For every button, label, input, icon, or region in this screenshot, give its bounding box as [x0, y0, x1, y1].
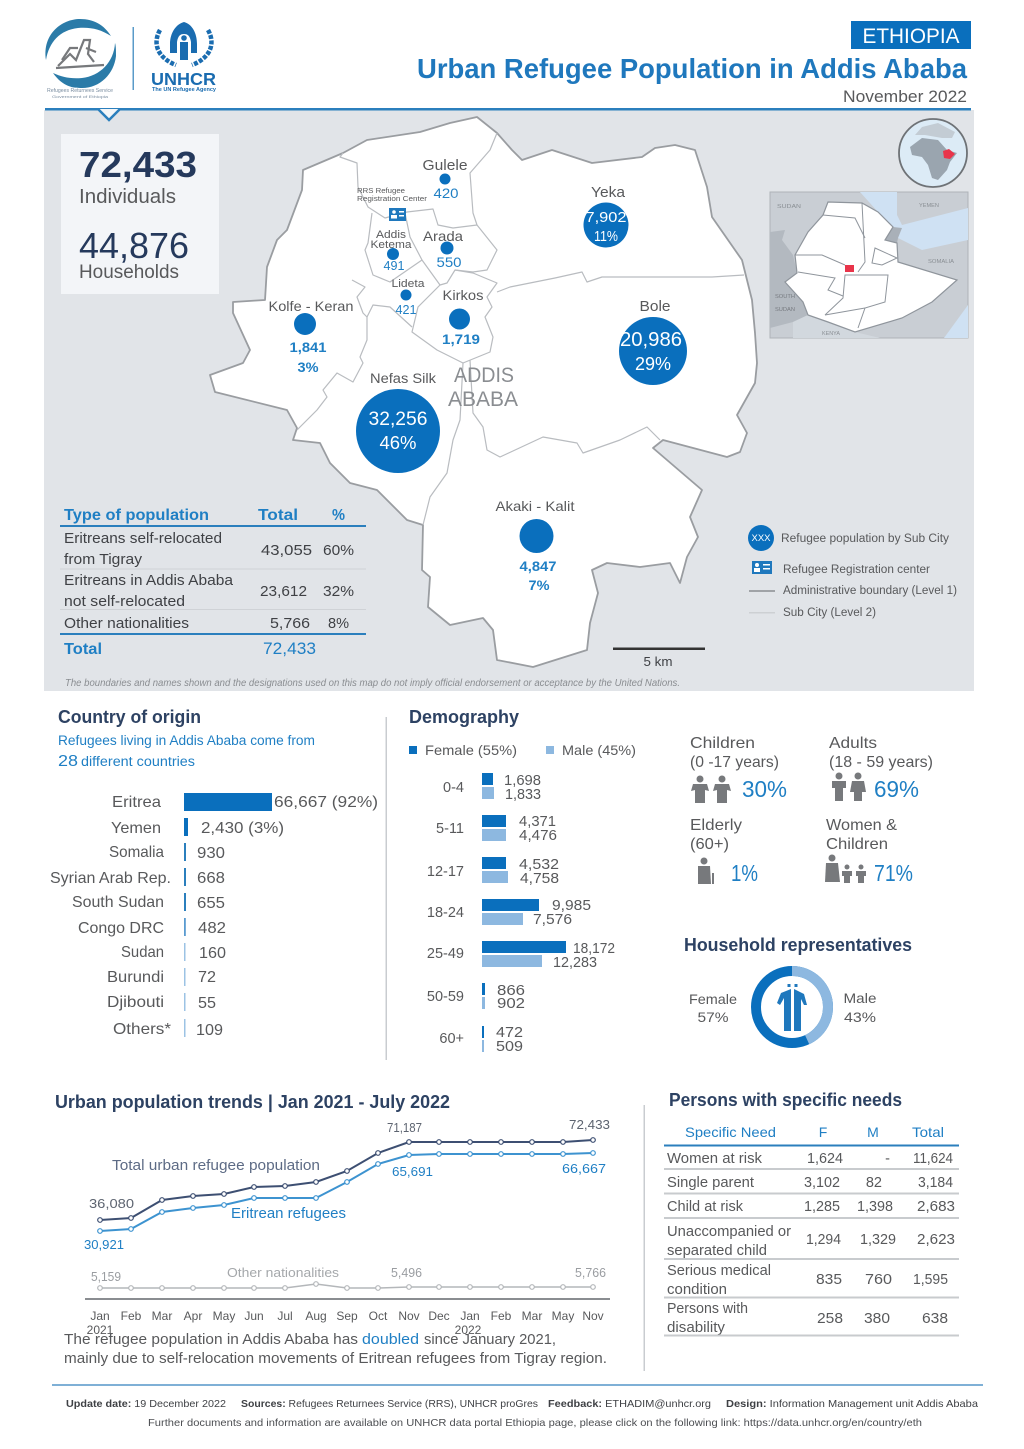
bar chart: country of origin: 109 — [196, 1022, 223, 1039]
scale bar — [613, 648, 705, 669]
table: specific needs: Single parent — [667, 1175, 754, 1191]
table: specific needs: 3,102 — [804, 1175, 840, 1191]
bar chart: age and sex: 509 — [496, 1039, 523, 1055]
data labels: 65,691 — [392, 1164, 433, 1179]
time axis labels: Sep — [336, 1309, 358, 1323]
footer: Design: Information Management unit Addis Ababa — [726, 1398, 978, 1410]
data labels: 5,766 — [575, 1265, 606, 1280]
stat: children — [690, 735, 787, 803]
bar chart: age and sex: 4,532 — [519, 857, 559, 873]
line chart — [84, 1117, 610, 1337]
series: other nationalities — [98, 1282, 595, 1290]
bar chart: age and sex — [427, 773, 615, 1055]
data labels: Other nationalities — [227, 1265, 340, 1280]
table: type of population: Total — [64, 641, 102, 658]
data labels: 30,921 — [84, 1237, 124, 1252]
stat: elderly: 1% — [731, 860, 758, 886]
logo: Refugees and Returnees Service: Government of Ethiopia — [52, 94, 109, 99]
heading: Country of origin — [58, 707, 201, 727]
sub city: Addis Ketema: Addis — [376, 229, 407, 241]
table: specific needs: Unaccompanied or — [667, 1224, 791, 1240]
intro text — [58, 733, 315, 770]
sub city: Kolfe-Keran: 1,841 — [290, 339, 327, 355]
bar chart: country of origin: 930 — [197, 845, 225, 862]
stat: children: 30% — [742, 776, 787, 802]
heading: Demography — [409, 707, 519, 727]
data labels: 66,667 — [562, 1161, 606, 1176]
sub city: Akaki-Kalit: 7% — [528, 577, 550, 593]
sub city: Yeka: 11% — [594, 228, 618, 245]
map legend: Refugee Registration center — [783, 564, 930, 576]
time axis labels: Jul — [277, 1309, 293, 1323]
table: type of population: 8% — [328, 615, 349, 632]
logo: Refugees and Returnees Service — [45, 19, 116, 99]
data labels: 5,496 — [391, 1265, 422, 1280]
sub city: Addis Ketema: Ketema — [370, 239, 412, 251]
table: type of population: Type of population — [64, 507, 209, 524]
data labels: 36,080 — [89, 1196, 134, 1211]
bar chart: age and sex: 9,985 — [552, 898, 591, 914]
logo: UNHCR: UNHCR — [151, 69, 216, 89]
bar chart: country of origin: 668 — [197, 870, 225, 887]
icon: woman and two children — [825, 854, 866, 883]
map of Addis Ababa sub cities — [210, 117, 757, 667]
logo: UNHCR: The UN Refugee Agency — [152, 87, 217, 93]
table: type of population: 23,612 — [260, 583, 307, 600]
date: November 2022 — [843, 87, 967, 106]
table: specific needs: Women at risk — [667, 1151, 763, 1167]
header — [45, 19, 971, 106]
table: specific needs: Total — [912, 1124, 944, 1140]
stat: children: Children — [690, 735, 755, 752]
inset map of Ethiopia: KENYA — [822, 331, 841, 337]
sub city: Akaki-Kalit: Akaki - Kalit — [496, 498, 575, 514]
table: specific needs: separated child — [667, 1243, 767, 1259]
table: type of population — [60, 507, 366, 658]
table: specific needs: 1,624 — [807, 1151, 843, 1167]
bar chart: age and sex: 0-4 — [443, 780, 464, 796]
legend: gender — [409, 742, 636, 758]
bar chart: country of origin: Djibouti — [107, 994, 164, 1011]
sub city: Gulele: Gulele — [422, 158, 468, 174]
sub city: Bole: 20,986 — [620, 329, 682, 351]
table: specific needs: 2,683 — [917, 1199, 955, 1215]
stat: elderly — [690, 817, 758, 886]
inset map of Ethiopia: SOMALIA — [928, 259, 954, 265]
table: type of population: not self-relocated — [64, 593, 185, 610]
footer — [52, 1384, 983, 1429]
time axis labels: Nov — [398, 1309, 420, 1323]
table: specific needs: disability — [667, 1320, 726, 1336]
sub city: Kirkos: 1,719 — [442, 331, 480, 347]
table: specific needs: 258 — [817, 1311, 843, 1327]
household representatives: Female — [689, 991, 737, 1007]
time axis labels: Mar — [522, 1309, 542, 1323]
table: specific needs: 760 — [865, 1272, 892, 1288]
table: specific needs: 1,285 — [804, 1199, 840, 1215]
legend: gender: Female (55%) — [425, 742, 517, 758]
bar chart: age and sex: 1,833 — [505, 787, 541, 803]
bar chart: country of origin: Others* — [113, 1021, 171, 1038]
bar chart: country of origin — [50, 793, 378, 1039]
table: specific needs: M — [867, 1124, 879, 1140]
bar chart: country of origin: Congo DRC — [78, 920, 164, 937]
table: specific needs: Serious medical — [667, 1263, 771, 1279]
callout: key figures: Households — [79, 262, 179, 283]
bar chart: country of origin: Syrian Arab Rep. — [50, 870, 171, 887]
map legend: Refugee population by Sub City — [781, 533, 949, 545]
sub city: Yeka: Yeka — [591, 185, 626, 201]
bar chart: age and sex: 12,283 — [553, 955, 597, 971]
bar chart: age and sex: 4,758 — [520, 871, 559, 887]
table: specific needs: - — [885, 1151, 890, 1167]
table: specific needs: 638 — [922, 1311, 948, 1327]
bar chart: country of origin: Sudan — [121, 944, 164, 961]
table: type of population: % — [332, 507, 345, 524]
sub city: Kolfe-Keran: 3% — [298, 359, 319, 375]
legend: gender: Male (45%) — [562, 742, 636, 758]
table: type of population: 43,055 — [261, 542, 312, 559]
bar chart: country of origin: 66,667 (92%) — [274, 794, 378, 811]
inset map of Ethiopia: SOUTH — [775, 294, 795, 300]
map legend: Administrative boundary (Level 1) — [783, 585, 957, 597]
time axis labels — [87, 1309, 604, 1337]
bar chart: age and sex: 1,698 — [504, 773, 541, 789]
time axis labels: May — [213, 1309, 235, 1323]
sub city: Arada: 550 — [436, 254, 462, 270]
icon: two children — [691, 776, 731, 803]
table: specific needs: 1,398 — [857, 1199, 893, 1215]
footer: Sources: Refugees Returnees Service (RRS), UNHCR proGres — [241, 1398, 538, 1410]
sub city: Gulele — [422, 158, 468, 201]
time axis labels: Apr — [184, 1309, 202, 1323]
bar chart: age and sex: 4,476 — [519, 828, 557, 844]
table: specific needs: condition — [667, 1282, 727, 1298]
household representatives: Household representatives — [684, 935, 912, 955]
sub city: Bole: 29% — [635, 354, 671, 374]
trend commentary: since January 2021, — [424, 1331, 556, 1348]
table: specific needs: Persons with — [667, 1301, 748, 1317]
panel: country of origin — [50, 707, 378, 1039]
table: specific needs: 380 — [864, 1311, 890, 1327]
table: specific needs: 82 — [866, 1175, 882, 1191]
bar chart: age and sex: 902 — [497, 996, 525, 1012]
sub city: Lideta — [392, 278, 425, 317]
sub city: Kirkos — [442, 288, 484, 347]
sub city: Lideta: Lideta — [392, 278, 425, 290]
data labels: 72,433 — [569, 1117, 610, 1132]
series: total — [98, 1138, 595, 1222]
inset map of Ethiopia: YEMEN — [919, 203, 939, 209]
logo: Refugees and Returnees Service: Refugees Returnees Service — [47, 88, 113, 94]
time axis labels: Dec — [428, 1309, 450, 1323]
bar chart: country of origin: South Sudan — [72, 894, 164, 911]
table: specific needs — [664, 1124, 959, 1336]
data labels: Eritrean refugees — [231, 1206, 346, 1222]
sub city: Kolfe-Keran: Kolfe - Keran — [268, 298, 354, 314]
panel: persons with specific needs — [664, 1090, 959, 1336]
household representatives: 57% — [698, 1009, 728, 1025]
bar chart: age and sex: 25-49 — [427, 946, 464, 962]
registration center label and icon: Registration Center — [357, 196, 428, 203]
sub city: Arada: Arada — [423, 228, 463, 244]
sub city: Addis Ketema — [370, 229, 412, 273]
bar chart: country of origin: 2,430 (3%) — [201, 820, 284, 837]
table: type of population: from Tigray — [64, 551, 143, 568]
trend commentary: The refugee population in Addis Ababa has — [64, 1331, 358, 1348]
table: specific needs: 1,329 — [860, 1232, 896, 1248]
globe locator — [899, 119, 967, 187]
stat: women and children — [825, 817, 913, 886]
time axis labels: Feb — [121, 1309, 142, 1323]
bar chart: country of origin: 160 — [199, 945, 226, 962]
sub city: Bole — [619, 299, 687, 385]
sub city: Yeka — [584, 185, 628, 248]
intro text: 28 — [58, 753, 78, 770]
stat: women and children: 71% — [874, 860, 913, 886]
bar chart: age and sex: 18,172 — [573, 941, 615, 957]
table: specific needs: 3,184 — [918, 1175, 953, 1191]
time axis labels: Aug — [305, 1309, 327, 1323]
bar chart: country of origin: Somalia — [109, 844, 164, 861]
time axis labels: Feb — [491, 1309, 512, 1323]
registration center label and icon — [357, 188, 428, 221]
panel: urban population trends — [55, 1092, 610, 1367]
footer: Feedback: ETHADIM@unhcr.org — [548, 1398, 711, 1410]
callout: key figures: 72,433 — [79, 144, 197, 185]
logo: UNHCR — [151, 22, 217, 93]
sub city: Nefas Silk: 46% — [380, 433, 416, 453]
bar chart: country of origin: 55 — [198, 995, 216, 1012]
bar chart: age and sex: 7,576 — [533, 912, 572, 928]
stat: adults — [829, 735, 933, 802]
table: type of population: 5,766 — [270, 615, 310, 632]
sub city: Addis Ketema: 491 — [384, 259, 405, 273]
scale bar: 5 km — [644, 655, 672, 669]
table: type of population: Total — [258, 507, 298, 524]
bar chart: age and sex: 18-24 — [427, 905, 464, 921]
bar chart: country of origin: 655 — [197, 895, 225, 912]
country tag: ETHIOPIA — [862, 25, 960, 48]
registration center label and icon: RRS Refugee — [357, 188, 405, 195]
sub city: Akaki-Kalit — [496, 498, 575, 593]
stat: adults: (18 - 59 years) — [829, 754, 933, 771]
table: specific needs: F — [819, 1124, 827, 1140]
panel: demography — [409, 707, 933, 1055]
table: specific needs: 1,595 — [913, 1272, 948, 1288]
intro text: Refugees living in Addis Ababa come from — [58, 733, 315, 748]
inset map of Ethiopia — [770, 192, 968, 338]
icon: elderly person — [698, 858, 714, 884]
stat: elderly: (60+) — [690, 836, 729, 853]
bar chart: country of origin: Eritrea — [112, 794, 161, 811]
city name: ADDIS — [454, 364, 514, 387]
table: type of population: 60% — [323, 542, 354, 559]
sub city: Akaki-Kalit: 4,847 — [520, 558, 557, 574]
intro text: different countries — [81, 754, 195, 769]
time axis labels: Nov — [582, 1309, 604, 1323]
trend commentary: doubled — [362, 1331, 419, 1348]
sub city: Yeka: 7,902 — [586, 209, 626, 226]
table: type of population: Eritreans self-relocated — [64, 530, 222, 547]
sub city: Bole: Bole — [640, 299, 670, 315]
data labels: 71,187 — [387, 1120, 422, 1135]
table: type of population: 72,433 — [263, 639, 316, 658]
stat: adults: Adults — [829, 735, 877, 752]
inset map of Ethiopia: SUDAN — [777, 204, 801, 210]
sub city: Gulele: 420 — [434, 185, 459, 201]
data labels: Total urban refugee population — [112, 1158, 320, 1174]
stat: adults: 69% — [874, 776, 919, 802]
table: type of population: Other nationalities — [64, 615, 189, 632]
sub city: Lideta: 421 — [396, 303, 417, 317]
stat: children: (0 -17 years) — [690, 754, 779, 771]
time axis labels: 2021 — [87, 1323, 114, 1337]
sub city: Kirkos: Kirkos — [442, 288, 484, 303]
callout: key figures — [61, 134, 219, 294]
donut chart: household head gender — [756, 971, 828, 1043]
bar chart: age and sex: 12-17 — [427, 864, 464, 880]
sub city: Arada — [423, 228, 463, 270]
household representatives: Male — [844, 990, 877, 1006]
trend commentary: mainly due to self-relocation movements of Eritrean refugees from Tigray region. — [64, 1350, 607, 1367]
stat: women and children: Women & — [826, 817, 897, 834]
map legend — [748, 525, 957, 619]
footer: Further documents and information are available on UNHCR data portal Ethiopia page, please click on the following link: https://data.unhcr.org/en/country/eth — [148, 1417, 922, 1429]
panel: map — [44, 108, 974, 691]
callout: key figures: Individuals — [79, 186, 176, 208]
time axis labels: 2022 — [455, 1323, 482, 1337]
icon: two adults — [832, 772, 866, 801]
bar chart: age and sex: 866 — [497, 983, 525, 999]
table: specific needs: Child at risk — [667, 1199, 744, 1215]
table: specific needs: 11,624 — [913, 1151, 953, 1167]
bar chart: age and sex: 4,371 — [519, 814, 556, 830]
map disclaimer: The boundaries and names shown and the designations used on this map do not imply official endorsement or acceptance by the United Nations. — [65, 678, 680, 689]
sub city: Nefas Silk: Nefas Silk — [370, 371, 436, 386]
bar chart: country of origin: Yemen — [111, 820, 161, 837]
sub city: Nefas Silk: 32,256 — [368, 409, 428, 430]
city name: ABABA — [448, 388, 518, 411]
stat: elderly: Elderly — [690, 817, 742, 834]
bar chart: country of origin: 72 — [198, 969, 216, 986]
footer: Update date: 19 December 2022 — [66, 1398, 226, 1410]
data labels: 5,159 — [91, 1269, 121, 1284]
time axis labels: Oct — [369, 1309, 388, 1323]
sub city: Kolfe-Keran — [268, 298, 354, 375]
table: specific needs: 835 — [816, 1272, 842, 1288]
bar chart: age and sex: 472 — [496, 1025, 523, 1041]
table: specific needs: 1,294 — [806, 1232, 841, 1248]
heading: Urban population trends | Jan 2021 - July 2022 — [55, 1092, 450, 1112]
stat: women and children: Children — [826, 836, 888, 853]
time axis labels: Mar — [152, 1309, 172, 1323]
inset map of Ethiopia: SUDAN — [775, 307, 795, 313]
time axis labels: Jan — [460, 1309, 480, 1323]
bar chart: age and sex: 5-11 — [436, 821, 464, 837]
bar chart: age and sex: 60+ — [439, 1031, 464, 1047]
map legend: Sub City (Level 2) — [783, 607, 876, 619]
callout: key figures: 44,876 — [79, 225, 189, 266]
trend commentary — [64, 1331, 607, 1367]
household representatives — [684, 935, 912, 1043]
title: Urban Refugee Population in Addis Ababa — [417, 53, 967, 84]
bar chart: country of origin: Burundi — [107, 969, 164, 986]
sub city: Nefas Silk — [356, 371, 440, 473]
city name — [448, 364, 518, 411]
table: specific needs: Specific Need — [685, 1124, 776, 1140]
country tag — [851, 21, 971, 49]
time axis labels: Jan — [90, 1309, 110, 1323]
map legend: XXX — [752, 533, 770, 543]
bar chart: age and sex: 50-59 — [427, 989, 464, 1005]
bar chart: country of origin: 482 — [198, 920, 226, 937]
data labels — [84, 1117, 610, 1284]
time axis labels: Jun — [244, 1309, 264, 1323]
series: Eritrean — [98, 1151, 595, 1233]
heading: Persons with specific needs — [669, 1090, 902, 1110]
time axis labels: May — [552, 1309, 574, 1323]
table: type of population: 32% — [323, 583, 354, 600]
table: specific needs: 2,623 — [917, 1232, 955, 1248]
household representatives: 43% — [844, 1009, 876, 1025]
table: type of population: Eritreans in Addis Ababa — [64, 572, 234, 589]
